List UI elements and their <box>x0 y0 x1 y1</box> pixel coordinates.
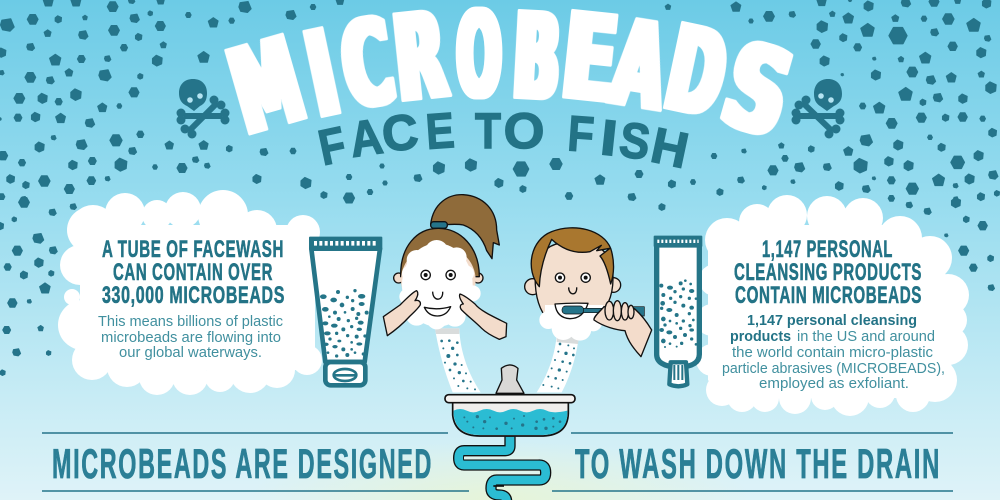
right foam stream <box>537 335 579 392</box>
right body copy: 1,147 personal cleansing <box>747 312 917 329</box>
right body copy: employed as exfoliant. <box>759 375 909 392</box>
microbeads: centre band under the title <box>239 0 754 210</box>
boy hand and arm <box>594 301 652 357</box>
microbeads: top left field <box>0 0 235 201</box>
text block: right facts <box>722 236 945 392</box>
girl face foam <box>399 240 481 329</box>
girl left hand <box>383 291 420 336</box>
banner text left: MICROBEADS ARE DESIGNED <box>52 440 433 487</box>
boy nose <box>569 287 577 294</box>
sink rim <box>445 395 575 403</box>
right heading: 1,147 PERSONAL <box>762 236 893 263</box>
panel: left foam cloud <box>58 190 322 395</box>
subtitle: FACE TO FISH <box>314 102 693 179</box>
girl eyes <box>421 270 455 280</box>
subtitle: FACE TO FISH: E <box>424 102 456 160</box>
illustration: boy brushing his teeth <box>525 228 652 357</box>
icon: toothpaste tube <box>655 237 701 386</box>
illustration: sink, faucet and drain pipe <box>445 365 575 500</box>
faucet <box>496 365 524 393</box>
title: MICROBEADS: I <box>297 6 349 144</box>
girl right hand <box>460 294 507 339</box>
left foam stream <box>435 328 481 392</box>
girl head and hair <box>394 228 483 315</box>
subtitle: FACE TO FISH: S <box>616 112 653 171</box>
right heading <box>734 236 922 309</box>
banner rule lines <box>42 433 953 491</box>
icon: facewash tube <box>310 238 381 385</box>
subtitle: FACE TO FISH: F <box>314 116 351 176</box>
skull and crossbones: right <box>792 79 844 138</box>
panel: right foam cloud <box>696 195 969 416</box>
subtitle: FACE TO FISH: C <box>379 103 421 163</box>
microbeads: lower right edge <box>906 198 995 291</box>
title: MICROBEADS: D <box>656 1 737 146</box>
subtitle: FACE TO FISH: O <box>504 103 544 159</box>
girl nose <box>433 292 443 299</box>
title: MICROBEADS <box>217 0 804 164</box>
title: MICROBEADS: M <box>217 13 317 162</box>
microbeads: lower left edge <box>0 198 77 376</box>
toothbrush <box>562 306 644 316</box>
skull and crossbones: left <box>176 79 230 138</box>
text block: left facts <box>98 236 285 361</box>
left heading: A TUBE OF FACEWASH <box>102 236 284 263</box>
boy head <box>525 243 621 320</box>
left heading <box>102 236 285 309</box>
pale green glow behind the drain <box>250 380 750 500</box>
subtitle: FACE TO FISH: T <box>475 103 501 159</box>
scattered microbeads <box>0 0 1000 376</box>
drain pipe <box>459 437 546 500</box>
boy eyes <box>555 273 590 282</box>
boy hair <box>531 228 614 287</box>
right body copy <box>722 312 945 392</box>
girl smile <box>424 307 451 316</box>
right body copy: particle abrasives (MICROBEADS), <box>722 360 945 377</box>
sink basin <box>453 403 568 436</box>
beads in the water <box>463 415 561 430</box>
banner: microbeads are designed to wash down the drain <box>42 433 953 491</box>
boy mouth <box>555 303 588 319</box>
subtitle: FACE TO FISH: I <box>598 109 620 167</box>
boy foam beard <box>539 305 603 341</box>
left heading: 330,000 MICROBEADS <box>102 282 285 309</box>
left body copy: microbeads are flowing into <box>101 329 281 346</box>
illustration: foam streams running to the sink <box>435 328 579 392</box>
subtitle: FACE TO FISH: F <box>566 105 596 163</box>
subtitle: FACE TO FISH: H <box>646 117 693 179</box>
microbeads: top right field <box>762 0 1000 201</box>
girl ponytail <box>431 195 499 259</box>
left body copy <box>98 313 283 361</box>
left body copy: This means billions of plastic <box>98 313 283 330</box>
title: MICROBEADS: S <box>711 16 804 164</box>
left heading: CAN CONTAIN OVER <box>113 259 273 286</box>
illustration: girl washing her face <box>383 195 507 339</box>
girl hair band <box>431 222 447 228</box>
right body copy: the world contain micro-plastic <box>732 344 933 361</box>
right body copy: products <box>730 328 791 345</box>
right body copy: in the US and around <box>797 328 935 345</box>
left body copy: our global waterways. <box>119 344 262 361</box>
subtitle: FACE TO FISH: A <box>346 109 386 169</box>
sink water <box>454 409 567 435</box>
